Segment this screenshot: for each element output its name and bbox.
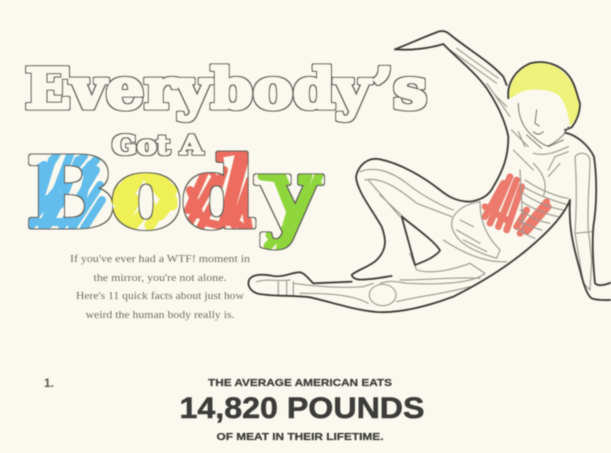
hair — [509, 63, 579, 126]
fact figure: 14,820 POUNDS — [180, 392, 424, 425]
intro line 4: weird the human body really is. — [86, 310, 234, 321]
intro line 1: If you've ever had a WTF! moment in — [70, 254, 250, 265]
heading: Everybody's: Everybody’s — [25, 56, 427, 121]
fact number: 1. — [44, 376, 54, 390]
skeleton bones and ribs — [257, 48, 592, 306]
organs: red scribble — [485, 177, 548, 233]
intro paragraph — [70, 254, 250, 321]
figure: reclining skeleton body — [248, 31, 611, 312]
fact closing line: OF MEAT IN THEIR LIFETIME. — [216, 431, 384, 443]
fact lead-in: THE AVERAGE AMERICAN EATS — [208, 377, 392, 389]
heading: Body with crayon colouring: Body — [27, 137, 322, 249]
title — [25, 56, 427, 249]
intro line 3: Here's 11 quick facts about just how — [76, 291, 245, 302]
body outline — [248, 31, 611, 312]
intro line 2: the mirror, you're not alone. — [94, 273, 226, 284]
fact 1 — [180, 377, 424, 443]
heading: Got A: Got A — [112, 131, 204, 161]
face and neck lines — [518, 103, 568, 148]
